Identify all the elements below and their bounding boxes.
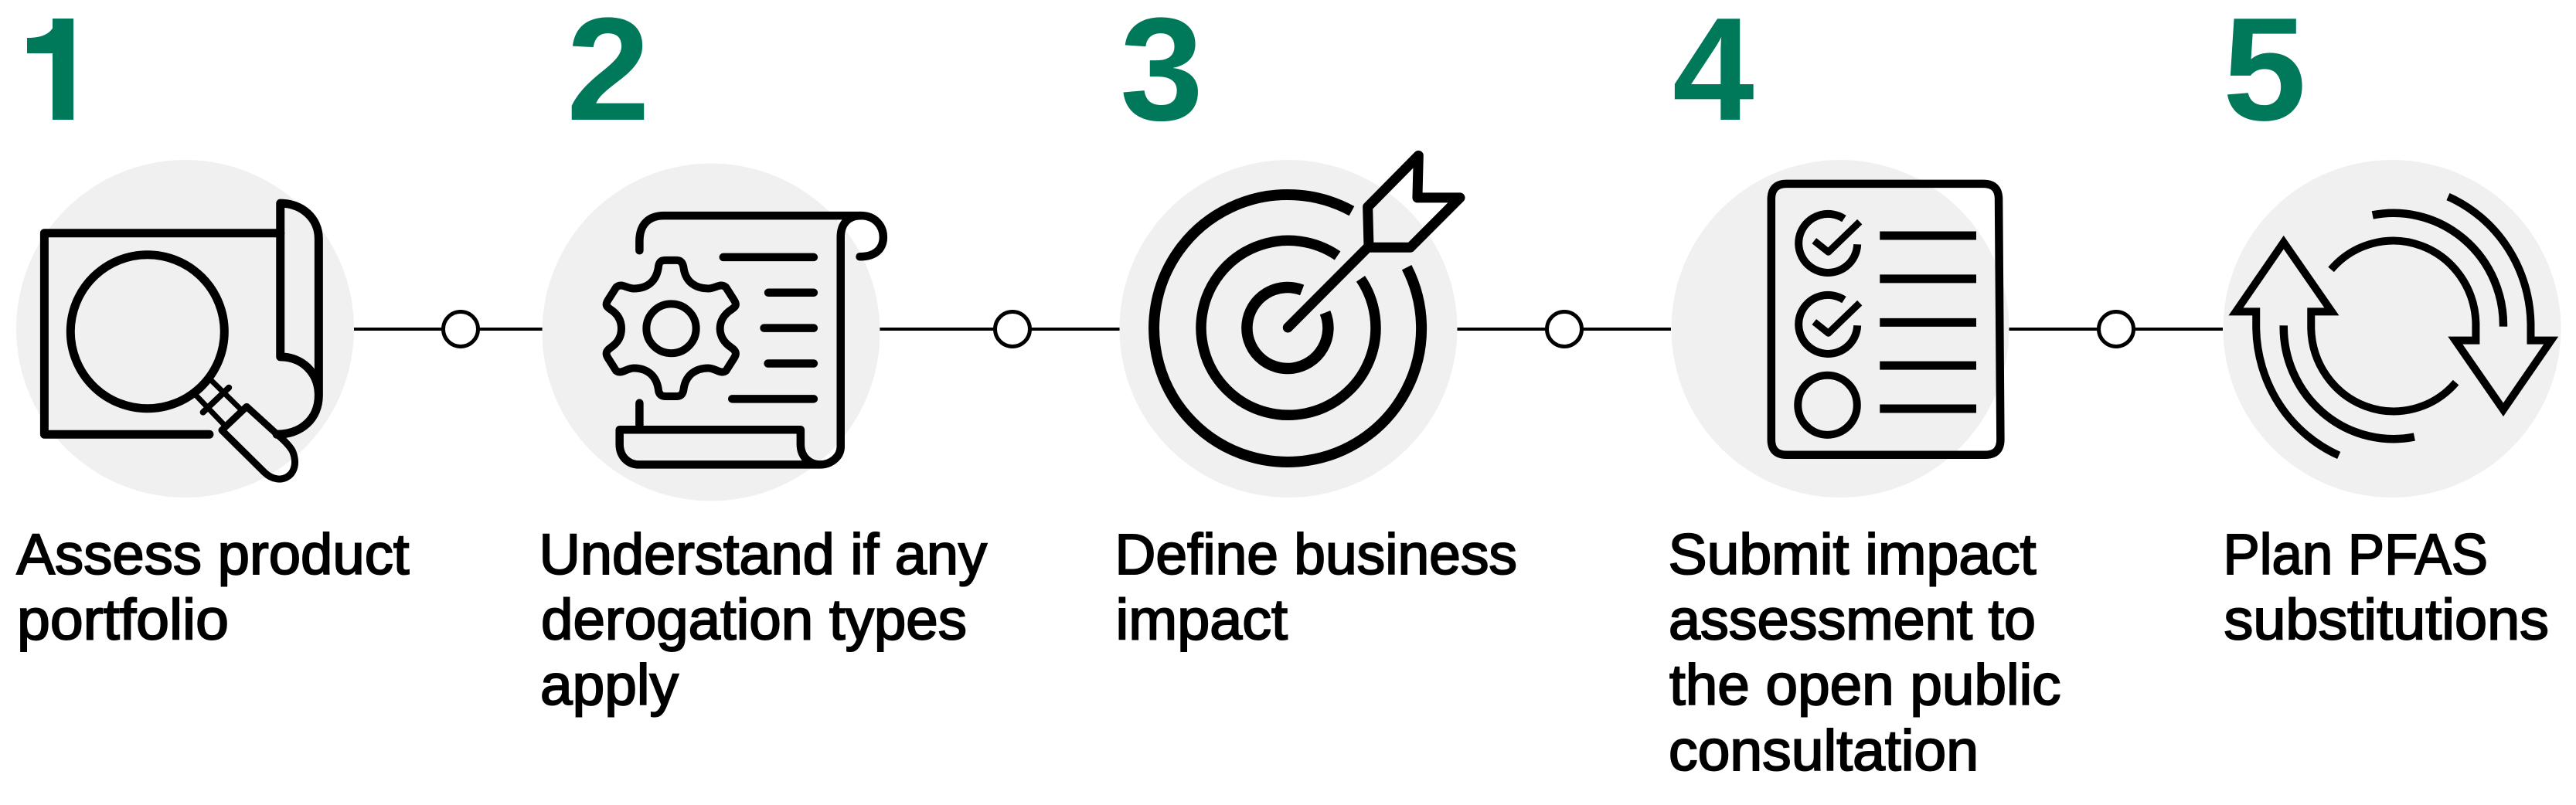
icon: scroll with magnifying glass xyxy=(44,203,318,479)
panel: step 5 substitutions xyxy=(2223,0,2561,652)
panel: step 2 derogation xyxy=(539,0,987,717)
icon: scroll with gear xyxy=(607,216,883,464)
label: step 2: Understand if any xyxy=(539,522,987,586)
step number 1 xyxy=(27,19,73,120)
icon background circle 1 xyxy=(16,160,354,498)
label: step 5: Plan PFAS xyxy=(2223,522,2488,586)
panel: step 4 submit xyxy=(1668,0,2060,783)
icon background circle 4 xyxy=(1671,160,2009,498)
label: step 5: substitutions xyxy=(2224,587,2549,652)
panel: step 1 assess xyxy=(16,0,410,652)
label: step 4 xyxy=(1668,522,2060,783)
label: step 1 xyxy=(17,522,410,652)
connector: step 2 to 3 xyxy=(880,312,1120,346)
label: step 5 xyxy=(2223,522,2549,652)
label: step 2: apply xyxy=(540,653,679,717)
label: step 4: the open public xyxy=(1669,653,2060,717)
label: step 4: assessment to xyxy=(1669,587,2036,652)
label: step 2 xyxy=(539,522,987,717)
icon background circle 5 xyxy=(2223,160,2561,498)
label: step 4: Submit impact xyxy=(1668,522,2037,586)
panel: step 3 business impact xyxy=(1114,0,1517,652)
icon: checklist xyxy=(1771,184,2000,455)
icon background circle 3 xyxy=(1119,160,1458,498)
label: step 3: impact xyxy=(1116,587,1288,652)
label: step 1: Assess product xyxy=(17,522,410,586)
connector: step 1 to 2 xyxy=(354,312,543,346)
label: step 1: portfolio xyxy=(17,587,229,652)
label: step 3 xyxy=(1114,522,1517,652)
icon background circle 2 xyxy=(543,164,880,501)
connector: step 3 to 4 xyxy=(1457,312,1671,346)
label: step 2: derogation types xyxy=(541,587,967,652)
connector: step 4 to 5 xyxy=(2009,312,2223,346)
label: step 3: Define business xyxy=(1114,522,1517,586)
icon: cycle arrows xyxy=(2236,197,2551,455)
icon: target with dart xyxy=(1154,155,1460,462)
label: step 4: consultation xyxy=(1669,718,1979,783)
